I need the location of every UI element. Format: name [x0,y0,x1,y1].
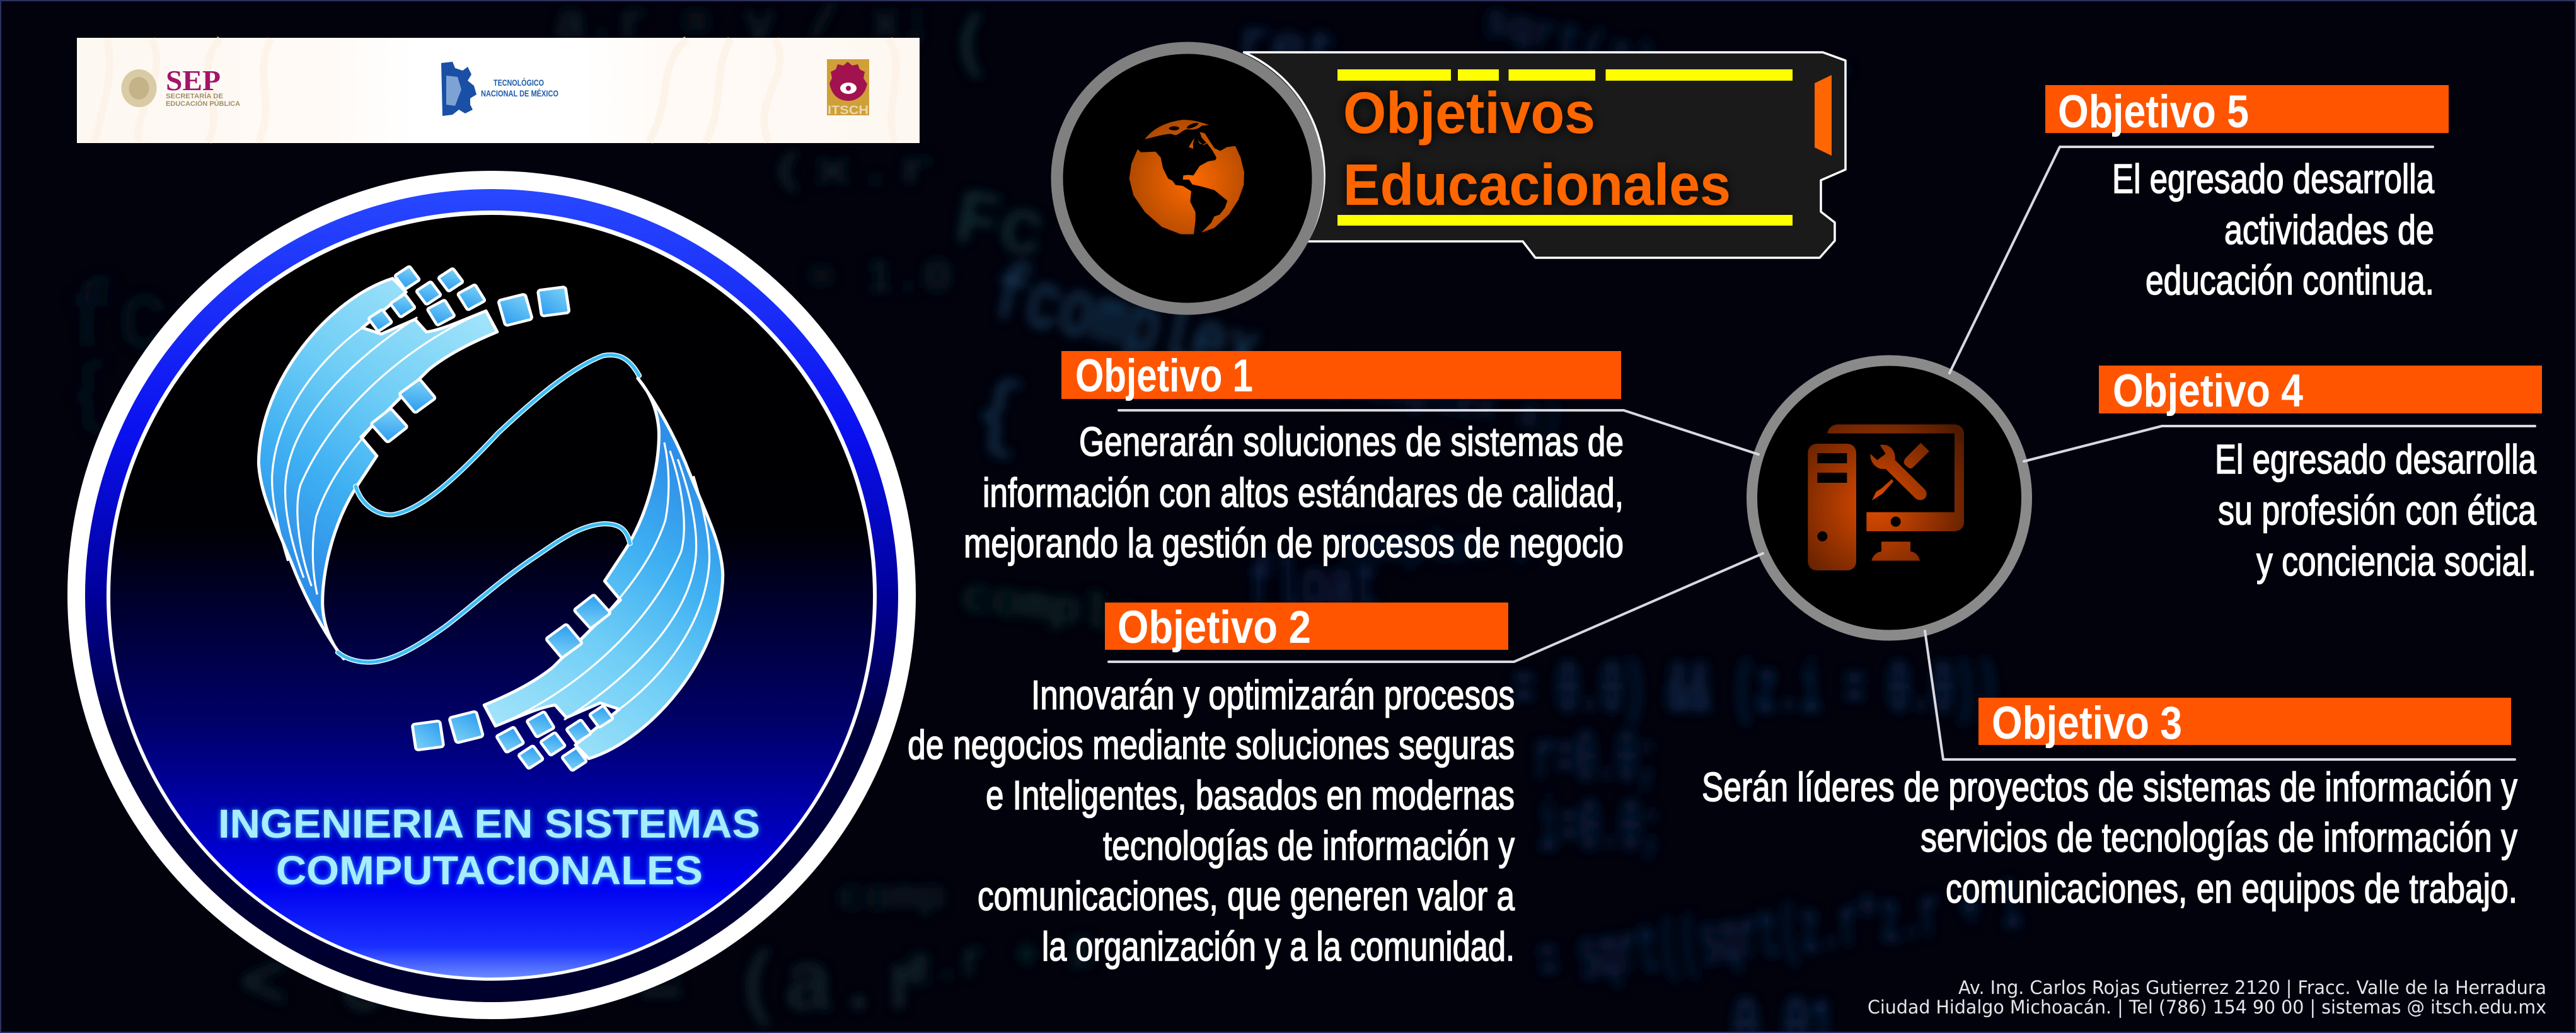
objective 1 [964,350,1624,566]
orange tab [1815,75,1832,156]
central hub [1752,361,2027,635]
background: blurred source code: = 1.0 [807,254,952,304]
background: blurred source code: ret [1233,11,1343,88]
title panel: Objetivos Educacionales [1057,48,1845,309]
background: blurred source code: r=0.0; [1534,720,1658,800]
yellow bars [1337,69,1793,226]
objective 1 text: Generarán soluciones de sistemas de [1079,418,1624,465]
objective 5 text: educación continua. [2146,257,2434,303]
objective 4 [2099,366,2542,584]
objective 3 heading [1978,698,2511,749]
objective 1 text [964,418,1624,566]
emblem caption: INGENIERIA EN SISTEMAS [218,801,760,846]
objective 2 [908,602,1515,969]
background: blurred source code: comp [838,877,945,920]
icon: computer with tools [1808,424,1964,570]
objective 1 heading: Objetivo 1 [1075,350,1253,401]
globe badge [1057,48,1318,309]
background: blurred source code: (x.r [769,147,939,197]
objective 2 text: Innovarán y optimizarán procesos [1031,672,1515,718]
footer contact details [1868,977,2546,1018]
hub ring [1752,361,2027,635]
objective 3 text [1702,764,2517,911]
objective 2 text: la organización y a la comunidad. [1042,923,1515,969]
title text [1343,80,1731,217]
objective 2 text [908,672,1515,969]
background: blurred source code: fc [66,268,170,376]
objective 5 text: El egresado desarrolla [2112,156,2435,202]
icon: globe [1129,120,1244,234]
background: blurred source code: i=0.0; [1538,789,1661,869]
logo: Tecnológico Nacional de México [441,62,558,116]
footer contact details: Av. Ing. Carlos Rojas Gutierrez 2120 | Fracc. Valle de la Herradura [1958,977,2546,998]
background: blurred source code: (complex a) [1321,355,1566,446]
background: blurred source code: { [967,368,1029,466]
background: blurred source code: < 0.0 i = (a.r [240,941,933,1033]
S symbol: central outlines [338,355,639,662]
logo: ITSCH: ITSCH [828,104,869,117]
logo banner [77,38,920,143]
objective 4 text [2215,436,2537,584]
title plate [1244,52,1845,258]
objective 2 text: de negocios mediante soluciones seguras [908,722,1515,768]
objective 3 [1702,698,2517,911]
objective 4 heading: Objetivo 4 [2113,366,2303,417]
footer contact details: Ciudad Hidalgo Michoacán. | Tel (786) 154 90 00 | sistemas @ itsch.edu.mx [1868,996,2546,1018]
objective 5 [2045,85,2449,303]
connector lines [1109,147,2535,759]
background: blurred source code: fcomplex [984,251,1268,400]
objective 1 text: mejorando la gestión de procesos de negocio [964,520,1624,566]
S symbol: lower-right band [412,378,723,771]
objective 2 text: e Inteligentes, basados en modernas [986,772,1515,818]
title text: Objetivos [1343,80,1595,146]
objective 5 heading: Objetivo 5 [2058,86,2249,137]
emblem caption [218,801,760,893]
background: blurred source code: z.r + z [903,922,1097,999]
objective 1 text: información con altos estándares de calidad, [983,470,1624,516]
background: blurred source code: float [1248,550,1380,625]
logo: SEP: SEP [166,64,221,96]
logo: Tecnológico Nacional de México: TECNOLÓGICO [494,77,544,88]
background: blurred source code: ( [952,6,993,84]
S symbol made of bands and tiles [258,266,723,771]
emblem: Ingeniería en Sistemas Computacionales [67,171,916,1019]
objective 2 heading: Objetivo 2 [1118,602,1311,653]
background: blurred source code: complex [959,573,1172,648]
S symbol: upper-left band [258,266,569,659]
background: blurred source code: x [1808,44,1860,109]
objective 1 heading [1061,350,1621,401]
logo: SEP [121,64,240,108]
emblem caption: COMPUTACIONALES [276,848,703,893]
background: blurred source code: = sqrt((sqrt(z.r*z.r + 1 [1534,866,2025,1005]
objective 5 heading [2045,85,2449,137]
logo: SEP: SECRETARÍA DE [166,92,223,100]
logo: Tecnológico Nacional de México: NACIONAL DE MÉXICO [481,88,558,98]
objective 2 text: comunicaciones, que generen valor a [978,873,1515,919]
objective 3 heading: Objetivo 3 [1992,698,2182,749]
logo: ITSCH [827,59,869,117]
logo: SEP: EDUCACIÓN PÚBLICA [166,100,240,108]
objective 5 text: actividades de [2224,207,2434,253]
objective 2 heading [1105,602,1508,653]
objective 5 text [2112,156,2435,303]
emblem rings [67,171,916,1019]
title text: Educacionales [1343,152,1731,217]
background: blurred source code: { [66,354,112,439]
background: blurred source code: complex c [1343,523,1532,575]
objective 4 heading [2099,366,2542,417]
background: blurred source code: Fc [948,178,1052,278]
background: blurred source code: = 0.0) && (z.i = 0.0)) [1513,651,1998,731]
objective 2 text: tecnologías de información y [1103,822,1515,869]
